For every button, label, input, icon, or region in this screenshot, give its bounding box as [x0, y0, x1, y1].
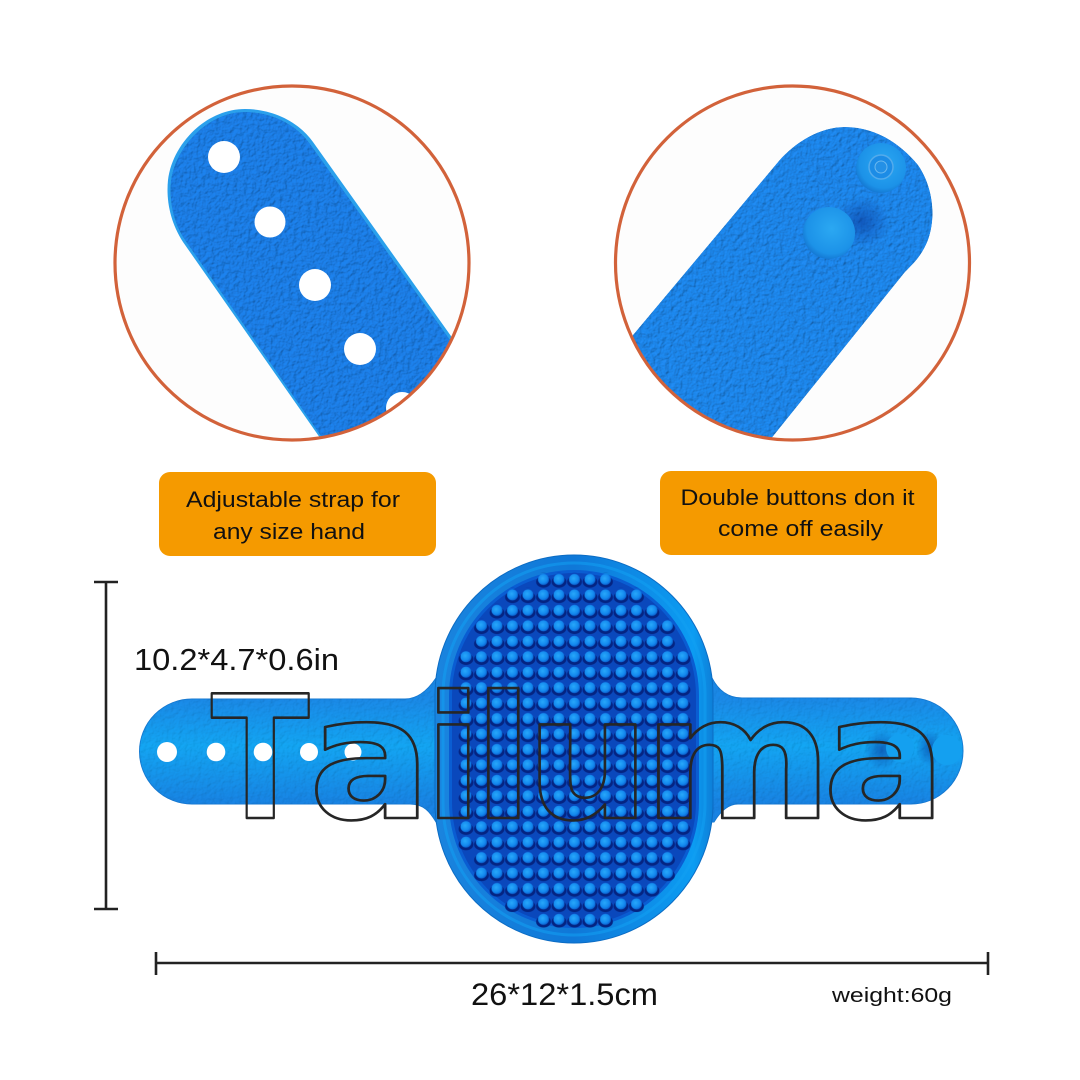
bristles [458, 572, 691, 928]
dimension label: centimetres: 26*12*1.5cm [471, 976, 658, 1012]
watermark: Tailuma outline text: i [424, 660, 483, 859]
callout: double buttons [660, 471, 937, 555]
panel: adjustable strap close-up [113, 84, 471, 442]
strap holes [157, 742, 362, 762]
dimension: height bracket [94, 582, 118, 909]
callout: double buttons: come off easily [718, 516, 884, 541]
strap buttons [864, 730, 962, 770]
strap with buttons [632, 127, 932, 438]
strap with holes [168, 109, 452, 436]
callout: adjustable strap [159, 472, 436, 556]
watermark: Tailuma outline text: l [474, 660, 533, 859]
weight label: weight:60g [831, 984, 952, 1007]
watermark: Tailuma outline text: m [643, 660, 832, 859]
product: brush with strap [140, 555, 963, 943]
panel: double buttons close-up [614, 84, 972, 442]
callout: adjustable strap: Adjustable strap for [186, 487, 401, 512]
watermark: Tailuma outline text: a [823, 660, 947, 859]
dimension label: inches: 10.2*4.7*0.6in [134, 643, 339, 677]
watermark: Tailuma outline text: a [309, 660, 432, 859]
strap [140, 678, 963, 822]
callout: adjustable strap: any size hand [213, 519, 365, 544]
callout: double buttons: Double buttons don it [680, 485, 915, 510]
watermark: Tailuma outline text: T [211, 660, 310, 859]
watermark: Tailuma outline text: u [526, 660, 650, 859]
brush head [435, 555, 713, 943]
dimension: width bracket [156, 952, 988, 975]
